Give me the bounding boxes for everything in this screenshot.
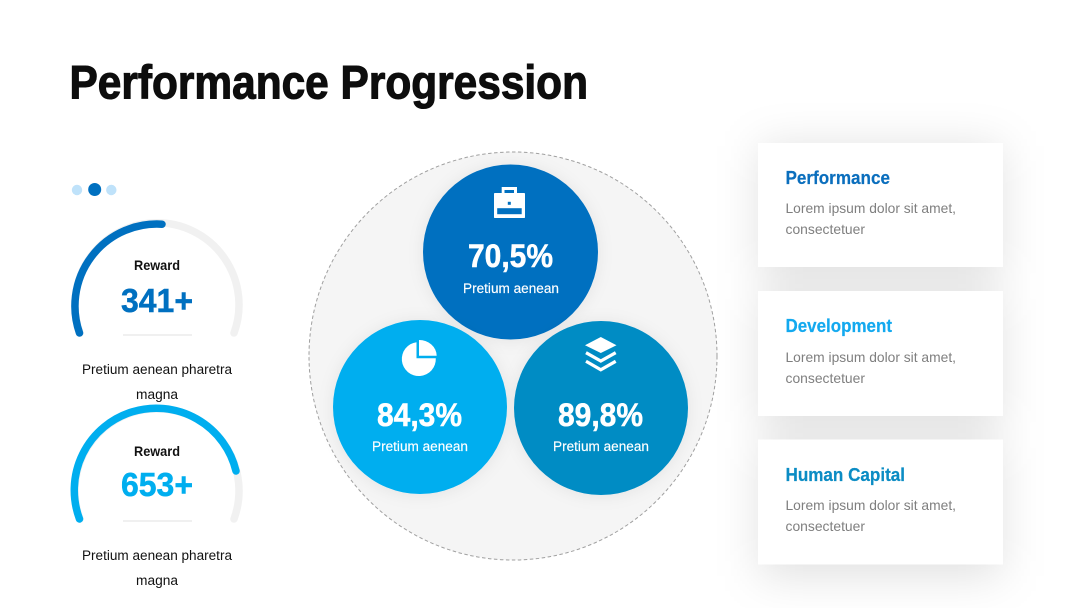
card: Performance: Lorem ipsum dolor sit amet, <box>786 200 956 216</box>
card: Performance: consectetuer <box>786 221 865 237</box>
card: Human Capital <box>758 440 1003 564</box>
icon: layers <box>585 337 616 370</box>
card: Human Capital: Lorem ipsum dolor sit amet, <box>786 497 956 513</box>
circle: 70,5%: Pretium aenean <box>463 281 559 296</box>
gauge: reward 653+: Pretium aenean pharetra <box>82 548 232 563</box>
gauge: reward 341+: 341+ <box>121 282 193 319</box>
circle: 89,8%: 89,8% <box>558 397 643 433</box>
card: Performance: Performance <box>786 168 890 188</box>
circle: 84,3%: 84,3% <box>377 397 462 433</box>
gauge: reward 653+: Reward <box>134 443 180 459</box>
icon: briefcase <box>494 187 525 218</box>
gauge: reward 341+: magna <box>136 387 178 402</box>
card: Human Capital: consectetuer <box>786 518 865 534</box>
card: Development: Lorem ipsum dolor sit amet, <box>786 349 956 365</box>
card: Performance <box>758 143 1003 267</box>
title: Performance Progression <box>70 56 588 108</box>
gauge: reward 653+: 653+ <box>121 466 193 503</box>
dashed background circle <box>309 152 717 560</box>
gauge: reward 653+ <box>74 408 239 588</box>
circle: 89,8% <box>514 321 688 495</box>
circle: 84,3%: Pretium aenean <box>372 439 468 454</box>
gauge: reward 653+: magna <box>136 573 178 588</box>
card: Development <box>758 291 1003 416</box>
circle: 70,5%: 70,5% <box>468 238 553 274</box>
circle: 89,8%: Pretium aenean <box>553 439 649 454</box>
card shadows <box>760 146 1001 576</box>
pagination dots <box>72 183 117 196</box>
circle: 70,5% <box>423 164 598 340</box>
card: Development: Development <box>786 316 892 336</box>
gauge: reward 341+: Reward <box>134 257 180 273</box>
icon: pie chart <box>402 340 437 376</box>
circle: 84,3% <box>333 320 507 494</box>
card: Human Capital: Human Capital <box>786 465 905 485</box>
card: Development: consectetuer <box>786 370 865 386</box>
gauge: reward 341+ <box>75 223 239 402</box>
gauge: reward 341+: Pretium aenean pharetra <box>82 362 232 377</box>
